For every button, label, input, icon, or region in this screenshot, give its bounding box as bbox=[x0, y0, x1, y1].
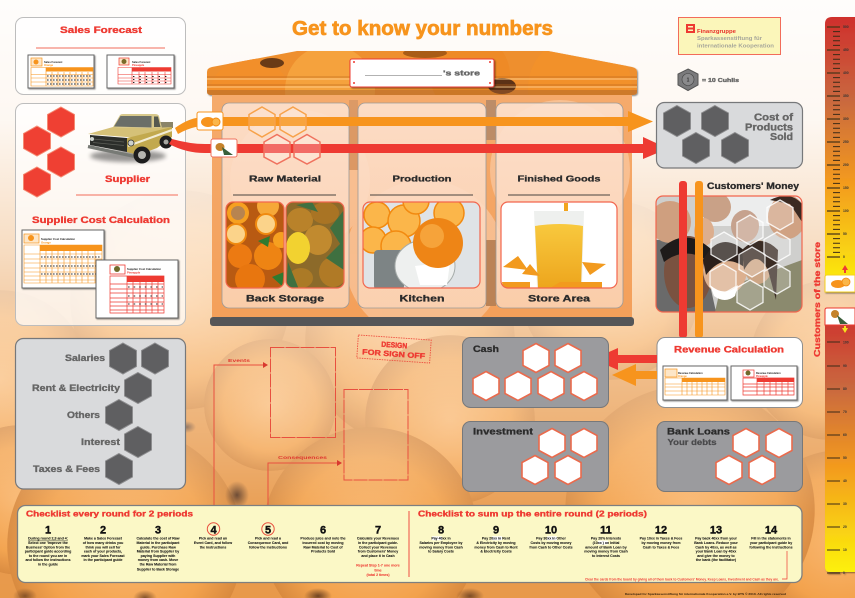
step 12 bbox=[640, 524, 682, 549]
ruler: pineapple customers: 40 bbox=[843, 479, 847, 483]
store building bbox=[207, 51, 639, 326]
ruler: pineapple customers: 70 bbox=[843, 410, 847, 414]
worksheet thumbnail: sales forecast pineapple bbox=[107, 55, 174, 88]
logo: Finanzgruppe: internationale Kooperation bbox=[697, 44, 774, 50]
step 8 bbox=[419, 524, 463, 554]
worksheet thumbnail: revenue pineapple: Pineapple bbox=[756, 375, 768, 378]
step 8: 8 bbox=[438, 524, 444, 536]
step 7: time bbox=[374, 568, 382, 572]
legend: hexagon equals 10 Cuhlis: = 10 Cuhlis bbox=[702, 78, 739, 84]
ruler: orange customers: 250 bbox=[843, 140, 849, 144]
step 3: Supplier to Back Storage bbox=[137, 568, 179, 572]
ruler: orange customers: 0 bbox=[843, 255, 845, 259]
panel: raw material and back storage bbox=[222, 103, 349, 308]
ruler: orange customers: 200 bbox=[843, 163, 849, 167]
step 10: from Cash to Other Costs bbox=[529, 545, 573, 549]
step 14: following the instructions bbox=[749, 545, 793, 549]
step 10: Pay 30xx in Other bbox=[536, 537, 566, 541]
logo: Finanzgruppe bbox=[678, 18, 780, 54]
heading: revenue calculation: Revenue Calculation bbox=[674, 344, 784, 356]
ruler: orange customers: 500 bbox=[843, 25, 849, 29]
step 2: 2 bbox=[100, 524, 106, 536]
step 11 bbox=[584, 524, 628, 558]
worksheet thumbnail: revenue orange bbox=[663, 366, 727, 400]
step 1: 1 bbox=[45, 524, 51, 536]
step 6: Products Sold bbox=[311, 550, 335, 554]
label: cost of products sold: Products bbox=[745, 122, 793, 134]
worksheet thumbnail: sales forecast orange: Sales Forecast bbox=[44, 60, 62, 64]
orange arrow: supplier to cost of products sold bbox=[175, 111, 653, 134]
worksheet thumbnail: sales forecast orange: Orange bbox=[44, 63, 54, 67]
step 10 bbox=[529, 524, 573, 549]
panel: finished goods and store area bbox=[496, 103, 623, 308]
ruler: pineapple customers bbox=[825, 308, 855, 575]
store base bbox=[210, 317, 634, 326]
step 7: (total 2 times) bbox=[366, 573, 390, 577]
ruler: orange customers: 150 bbox=[843, 186, 849, 190]
step 9: 9 bbox=[493, 524, 499, 536]
label: kitchen: Kitchen bbox=[400, 294, 444, 304]
step 9: Pay 20xx in Rent bbox=[482, 537, 511, 541]
step 7: Collect your Revenues bbox=[359, 545, 397, 549]
worksheet thumbnail: sales forecast orange bbox=[28, 55, 94, 88]
orange vertical bar: revenue flow bbox=[695, 181, 703, 338]
worksheet thumbnail: revenue pineapple bbox=[731, 366, 797, 400]
step 14 bbox=[749, 524, 793, 549]
step 13: 13 bbox=[710, 524, 722, 536]
step 11: (10xx ) on Initial bbox=[593, 541, 619, 545]
worksheet thumbnail: sales forecast pineapple: Pineapple bbox=[132, 63, 145, 67]
step 3: Material in the participant bbox=[137, 541, 180, 545]
step 1: Business' Option from the bbox=[26, 545, 70, 549]
icon: pineapple thumbnail bbox=[211, 139, 237, 157]
connector: step 4 to event card bbox=[214, 358, 268, 520]
heading: raw material: Raw Material bbox=[249, 174, 321, 184]
worksheet thumbnail: revenue pineapple: Revenue Calculation bbox=[756, 372, 781, 375]
credit line: Developed for Sparkassenstiftung für internationale Kooperation e.V. by BTS © 2010. All rights reserved bbox=[625, 592, 786, 596]
heading: production: Production bbox=[392, 174, 452, 184]
step 2 bbox=[81, 524, 125, 562]
store roof bbox=[207, 51, 639, 97]
panel: bank loans bbox=[657, 422, 802, 492]
step 7: in the participant guide. bbox=[358, 541, 398, 545]
step 6: 6 bbox=[320, 524, 326, 536]
step 2: Make a Sales Forecast bbox=[84, 537, 123, 541]
orange thumbnail bbox=[825, 275, 855, 292]
panel: sales forecast bbox=[16, 18, 186, 94]
icon: oranges thumbnail bbox=[197, 112, 223, 130]
step 3: money from cash. Move bbox=[138, 558, 178, 562]
red vertical bar: revenue flow bbox=[679, 181, 687, 338]
white hexagons bbox=[522, 428, 597, 484]
worksheet thumbnail: supplier cost orange: Supplier Cost Calculation bbox=[41, 237, 75, 241]
worksheet thumbnail: revenue orange: Revenue Calculation bbox=[678, 372, 703, 375]
red arrow: supplier to cost of products sold bbox=[169, 137, 668, 159]
photo: group of customers bbox=[649, 192, 806, 312]
label: back storage: Back Storage bbox=[246, 294, 324, 304]
step 7: Calculate your Revenues bbox=[357, 537, 399, 541]
step 12: by moving money from bbox=[641, 541, 681, 545]
step 7: Repeat Step 1-7 one more bbox=[356, 563, 400, 567]
step 7: and place it in Cash bbox=[361, 554, 395, 558]
step 14: your participant guide by bbox=[750, 541, 792, 545]
red arrow: revenue to cash bbox=[593, 348, 657, 370]
ruler: pineapple customers: 80 bbox=[843, 387, 847, 391]
event card placeholder bbox=[270, 348, 336, 438]
orange arrow: revenue to cash bbox=[612, 364, 657, 386]
cost labels: Interest bbox=[81, 437, 120, 447]
white hexagons bbox=[473, 344, 597, 400]
step 8: Pay 40xx in bbox=[431, 537, 451, 541]
step 5 bbox=[248, 523, 288, 549]
worksheet thumbnail: supplier cost orange: Orange bbox=[41, 240, 51, 244]
label: cost of products sold bbox=[745, 112, 794, 143]
worksheet thumbnail: supplier cost orange bbox=[22, 230, 104, 288]
step 12: Cash to Taxes & Fees bbox=[643, 545, 679, 549]
ruler: pineapple customers: 30 bbox=[843, 502, 847, 506]
pineapple thumbnail bbox=[825, 308, 855, 325]
ruler: pineapple customers: 50 bbox=[843, 456, 847, 460]
connector: step 5 to consequence card: Consequences bbox=[278, 455, 327, 461]
photo: juicing an orange bbox=[364, 202, 480, 288]
step 7: from Customers' Money bbox=[358, 550, 398, 554]
white hexagons bbox=[716, 428, 792, 484]
ruler: pineapple customers: 90 bbox=[843, 364, 847, 368]
logo: Finanzgruppe: Sparkassenstiftung für bbox=[697, 36, 762, 42]
step 3: Calculate the cost of Raw bbox=[137, 537, 180, 541]
heading: investment: Investment bbox=[473, 426, 534, 438]
heading: cash: Cash bbox=[473, 344, 499, 355]
step 3: paying Supplier with bbox=[141, 554, 175, 558]
step 1: in the guide bbox=[38, 562, 58, 566]
ruler: orange customers: 450 bbox=[843, 48, 849, 52]
axis title: customers of the store: Customers of the store bbox=[812, 242, 822, 357]
heading: customers' money: Customers' Money bbox=[707, 181, 799, 191]
label: cost of products sold: Cost of bbox=[754, 112, 794, 124]
step 1: and follow the instructions bbox=[25, 558, 71, 562]
step 13: the bank (the facilitator) bbox=[696, 558, 736, 562]
step 6: incurred cost by moving bbox=[302, 541, 344, 545]
step 7: 7 bbox=[375, 524, 381, 536]
step 9: & Electricity by moving bbox=[476, 541, 516, 545]
step 3: guide. Purchase Raw bbox=[140, 545, 176, 549]
connector: step 5 to consequence card bbox=[268, 455, 342, 520]
step 1: participant guide according bbox=[25, 550, 71, 554]
photo: pineapples bbox=[286, 202, 344, 288]
step 5: 5 bbox=[265, 524, 271, 536]
heading: checklist sum up: Checklist to sum up the entire round (2 periods) bbox=[418, 508, 647, 518]
red hexagon outlines on arrow bbox=[264, 134, 320, 164]
step 4: the instructions bbox=[200, 545, 226, 549]
ruler: pineapple customers: 100 bbox=[843, 340, 849, 344]
ruler: orange customers bbox=[825, 17, 855, 292]
step 2: think you will sell for bbox=[85, 545, 121, 549]
heading: checklist every round: Checklist every round for 2 periods bbox=[26, 508, 193, 518]
step 10: Costs by moving money bbox=[530, 541, 572, 545]
panel: investment bbox=[462, 422, 608, 492]
step 10: 10 bbox=[545, 524, 557, 536]
ruler: pineapple customers: 10 bbox=[843, 548, 847, 552]
step 2: each of your products, bbox=[84, 550, 122, 554]
note: clear the board: Clear the cards from the board by giving all of them back to Customers' Money. Keep Loans, Investment and Cash as they are. bbox=[585, 578, 779, 582]
step 13: Cash by 40xx, as well as bbox=[695, 545, 737, 549]
supplier hexagons bbox=[24, 107, 74, 197]
logo: Finanzgruppe: Finanzgruppe bbox=[697, 29, 736, 35]
legend: hexagon equals 10 Cuhlis bbox=[678, 69, 739, 90]
stamp: design for sign off bbox=[357, 335, 431, 363]
note: clear the board bbox=[585, 551, 787, 582]
step 5: follow the instructions bbox=[249, 545, 287, 549]
step 8: moving money from Cash bbox=[419, 545, 463, 549]
label: your debts: Your debts bbox=[668, 438, 717, 447]
step 13: Bank Loans. Reduce your bbox=[694, 541, 738, 545]
step 3: the Raw Material from bbox=[140, 562, 176, 566]
legend: hexagon equals 10 Cuhlis: 1 bbox=[687, 78, 690, 84]
photo: glass of juice bbox=[501, 202, 617, 288]
label: cost of products sold: Sold bbox=[770, 132, 793, 143]
step 3: Material from Supplier by bbox=[137, 550, 179, 554]
step 13: and give the money to bbox=[697, 554, 736, 558]
worksheet thumbnail: sales forecast pineapple: Sales Forecast bbox=[132, 60, 150, 64]
cost labels: Taxes & Fees bbox=[33, 464, 100, 474]
panel: cash bbox=[462, 338, 608, 408]
ruler: pineapple customers: 20 bbox=[843, 525, 847, 529]
step 11: to Interest Costs bbox=[592, 554, 620, 558]
connector: step 4 to event card: Events bbox=[228, 358, 250, 364]
step 8: to Salary Costs bbox=[428, 550, 454, 554]
step 9: & Electricity Costs bbox=[480, 550, 512, 554]
ruler: orange customers: 400 bbox=[843, 71, 849, 75]
cost labels bbox=[32, 353, 120, 474]
step 3 bbox=[137, 524, 180, 572]
step 11: moving money from Cash bbox=[584, 550, 628, 554]
step 13 bbox=[694, 524, 738, 562]
step 14: 14 bbox=[765, 524, 778, 536]
panel: production and kitchen bbox=[358, 103, 486, 308]
sign: store name: 's store bbox=[443, 68, 480, 78]
panel: cost of products sold bbox=[656, 102, 802, 168]
ruler: orange customers: 350 bbox=[843, 94, 849, 98]
cost labels: Salaries bbox=[65, 353, 105, 363]
ruler: orange customers: 300 bbox=[843, 117, 849, 121]
panel: supplier bbox=[16, 104, 186, 326]
worksheet thumbnail: supplier cost pineapple: Pineapple bbox=[127, 270, 141, 274]
step 9: money from Cash to Rent bbox=[474, 545, 518, 549]
ruler: pineapple customers: 60 bbox=[843, 433, 847, 437]
heading: sales forecast: Sales Forecast bbox=[60, 25, 143, 36]
step 4: 4 bbox=[210, 524, 217, 536]
worksheet thumbnail: revenue orange: Orange bbox=[678, 375, 687, 378]
step 6: Produce juice and note the bbox=[300, 537, 346, 541]
ruler: orange customers: 50 bbox=[843, 232, 847, 236]
step 4: Pick and read an bbox=[199, 537, 227, 541]
ruler: orange customers: 100 bbox=[843, 209, 849, 213]
step 12: Pay 10xx in Taxes & Fees bbox=[640, 537, 682, 541]
step 2: of how many drinks you bbox=[83, 541, 123, 545]
heading: finished goods: Finished Goods bbox=[518, 174, 601, 184]
step 13: Pay back 40xx from your bbox=[695, 537, 738, 541]
label: supplier: Supplier bbox=[105, 174, 150, 185]
heading: bank loans: Bank Loans bbox=[667, 426, 730, 438]
stamp: design for sign off: DESIGN bbox=[381, 340, 408, 350]
step 12: 12 bbox=[655, 524, 667, 536]
step 1: to the round you are in bbox=[29, 554, 67, 558]
step 6: Raw Material to Cost of bbox=[303, 545, 343, 549]
step 11: amount of Bank Loan by bbox=[585, 545, 627, 549]
panel: checklists bbox=[18, 506, 802, 582]
step 4 bbox=[194, 523, 232, 549]
step 13: your Bank Loan by 40xx bbox=[696, 550, 736, 554]
panel: revenue calculation bbox=[657, 338, 802, 408]
icon: pickup truck bbox=[88, 114, 173, 164]
ruler: pineapple customers: 0 bbox=[843, 571, 845, 575]
panel: operating costs bbox=[16, 338, 186, 489]
worksheet thumbnail: supplier cost pineapple: Supplier Cost Calculation bbox=[127, 267, 161, 271]
step 7 bbox=[356, 524, 400, 577]
cost hexagons bbox=[106, 343, 168, 484]
step 1: Select one 'Improve the bbox=[28, 541, 68, 545]
step 14: Fill in the statements in bbox=[751, 537, 791, 541]
cost labels: Others bbox=[67, 410, 100, 420]
photo: oranges bbox=[226, 202, 284, 288]
step 11: 11 bbox=[600, 524, 612, 536]
orange hexagon outlines on arrow bbox=[249, 107, 306, 137]
step 6 bbox=[300, 524, 346, 554]
step 2: mark your Sales Forecast bbox=[81, 554, 125, 558]
heading: supplier cost calculation: Supplier Cost Calculation bbox=[32, 215, 170, 226]
step 2: in the participant guide bbox=[83, 558, 123, 562]
step 3: 3 bbox=[155, 524, 161, 536]
step 5: Pick and read a bbox=[255, 537, 281, 541]
step 8: Salaries per Employee by bbox=[420, 541, 463, 545]
title: Get to know your numbers bbox=[292, 18, 553, 40]
step 9 bbox=[474, 524, 518, 554]
step 1: During round 2,3 and 4: bbox=[28, 537, 68, 541]
consequence card placeholder bbox=[344, 390, 408, 480]
label: store area: Store Area bbox=[528, 294, 591, 304]
stamp: design for sign off: FOR SIGN OFF bbox=[362, 347, 426, 361]
step 4: Event Card, and follow bbox=[194, 541, 232, 545]
step 5: Consequence Card, and bbox=[248, 541, 288, 545]
worksheet thumbnail: supplier cost pineapple bbox=[96, 260, 178, 318]
dark hexagons bbox=[664, 106, 748, 164]
step 1 bbox=[25, 524, 71, 566]
step 11: Pay 20% Interests bbox=[591, 537, 621, 541]
store walls bbox=[212, 95, 632, 340]
sign: store name bbox=[350, 59, 494, 87]
cost labels: Rent & Electricity bbox=[32, 383, 120, 393]
